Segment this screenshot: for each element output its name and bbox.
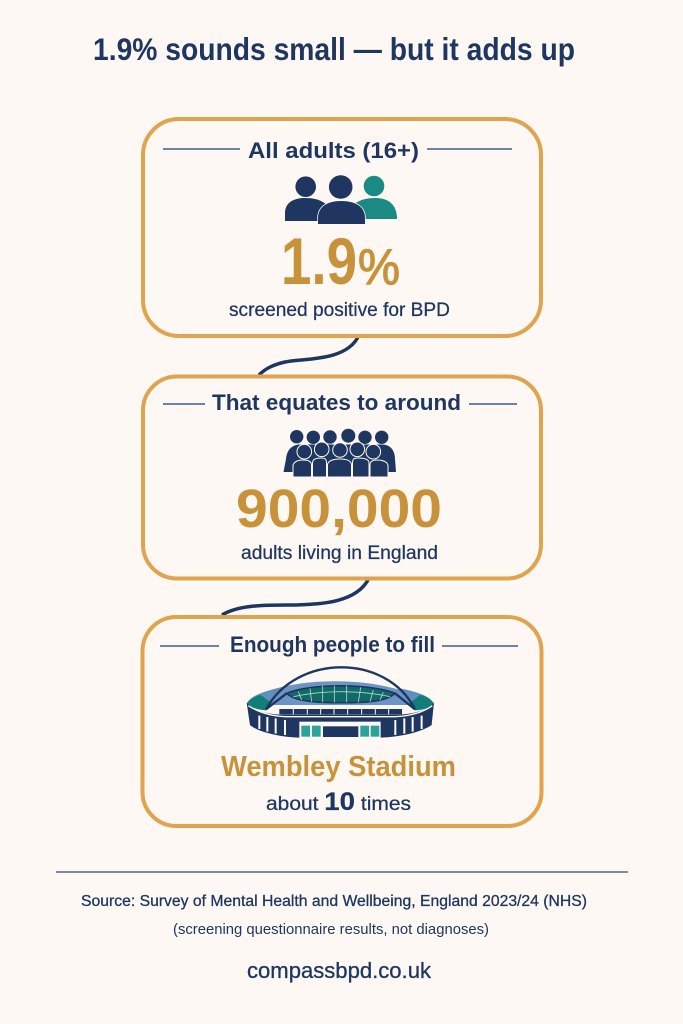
caption: screened positive: screened positive for BPD	[229, 300, 450, 321]
source line 1: Source: Survey of Mental Health and Wellbeing, England 2023/24 (NHS)	[81, 893, 587, 910]
icon: crowd	[284, 429, 396, 477]
panel: Wembley Stadium	[142, 617, 542, 826]
label: Wembley Stadium: Wembley Stadium	[221, 751, 456, 783]
connector: box 1 to box 2	[259, 337, 358, 375]
title: 1.9% sounds small — but it adds up	[93, 31, 575, 67]
heading: all adults: All adults (16+)	[248, 138, 419, 163]
connector: box 2 to box 3	[222, 580, 368, 615]
heading: enough people: Enough people to fill	[230, 632, 435, 657]
stat: 1.9%: 1.9	[281, 224, 357, 298]
caption: about 10 times: about 10 times	[266, 788, 411, 816]
stat: percent sign: %	[358, 239, 400, 295]
panel: 900,000 adults	[143, 376, 541, 578]
source line 2: (screening questionnaire results, not diagnoses)	[173, 921, 489, 938]
icon: three people	[285, 175, 397, 224]
icon: stadium	[247, 667, 434, 738]
panel: all adults	[143, 119, 541, 336]
caption: adults living in England: adults living in England	[241, 543, 438, 564]
heading: equates: That equates to around	[212, 390, 461, 415]
website: compassbpd.co.uk	[247, 958, 432, 983]
stat: 900,000: 900,000	[236, 479, 442, 539]
